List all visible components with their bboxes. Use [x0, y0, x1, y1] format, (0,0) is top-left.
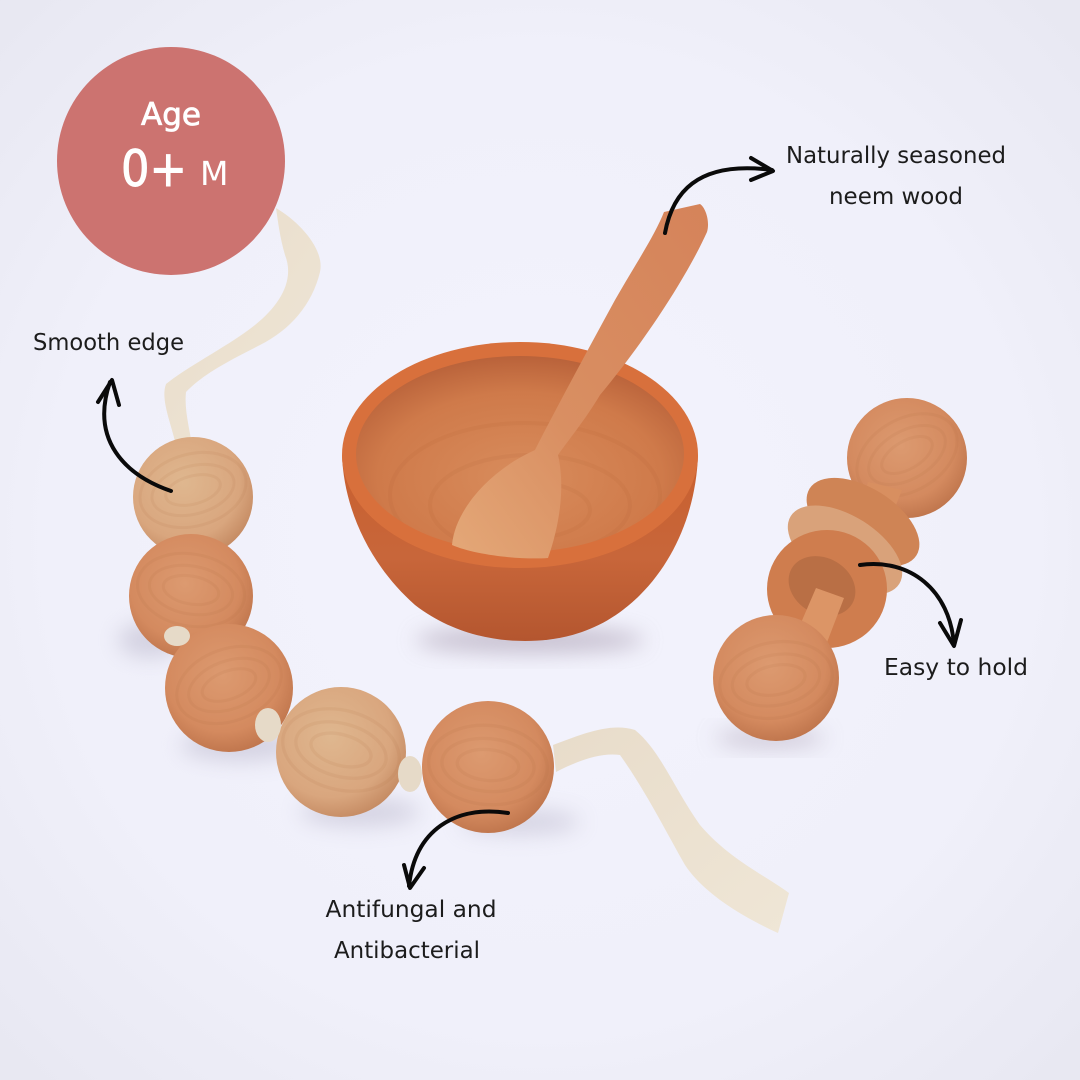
- ring 2: [773, 487, 917, 613]
- bead shadows: [118, 622, 580, 834]
- bead 2: [129, 534, 253, 658]
- knot 3: [398, 756, 422, 792]
- callout: Antifungal and Antibacterial: [326, 897, 496, 964]
- cloth tie: top: [164, 208, 321, 446]
- cloth tie: bottom: [553, 728, 789, 933]
- callout: Naturally seasoned neem wood: [786, 143, 1006, 210]
- spoon: [452, 204, 708, 558]
- callout: Antifungal and Antibacterial: Antifungal and: [326, 897, 496, 923]
- interior grain: [390, 423, 660, 567]
- age badge: 0+: [121, 140, 187, 198]
- age badge: [57, 47, 285, 275]
- callout: Easy to hold: Easy to hold: [884, 655, 1028, 681]
- arrow: to neem wood: [665, 158, 773, 233]
- stem neck: [860, 482, 902, 520]
- bead 5: [422, 701, 554, 833]
- knot 1: [164, 626, 190, 646]
- bottom ball: [713, 615, 839, 741]
- age badge: Age: [141, 97, 201, 133]
- wooden bead rattle with cloth ties: [118, 208, 789, 933]
- ring 3: [767, 530, 887, 648]
- handle: [797, 588, 844, 645]
- bead 3: [165, 624, 293, 752]
- rattle toy: [713, 397, 972, 747]
- bowl and spoon: [342, 204, 708, 653]
- callout: Naturally seasoned neem wood: Naturally seasoned: [786, 143, 1006, 169]
- age badge: M: [200, 154, 228, 193]
- top ball: [842, 397, 972, 518]
- arrow: to easy to hold: [860, 564, 961, 646]
- callout: Smooth edge: Smooth edge: [33, 330, 184, 356]
- bowl body: [342, 455, 698, 641]
- bowl interior: [356, 356, 684, 552]
- bead 1: [132, 437, 254, 557]
- callout: Naturally seasoned neem wood: neem wood: [829, 184, 963, 210]
- callout: Antifungal and Antibacterial: Antibacterial: [334, 938, 480, 964]
- ring 1: [792, 460, 934, 584]
- bead 4: [273, 687, 409, 817]
- arrow: to smooth edge: [98, 380, 171, 491]
- knot 2: [255, 708, 281, 742]
- arrow: to antifungal: [404, 812, 508, 888]
- bowl rim: [342, 342, 698, 568]
